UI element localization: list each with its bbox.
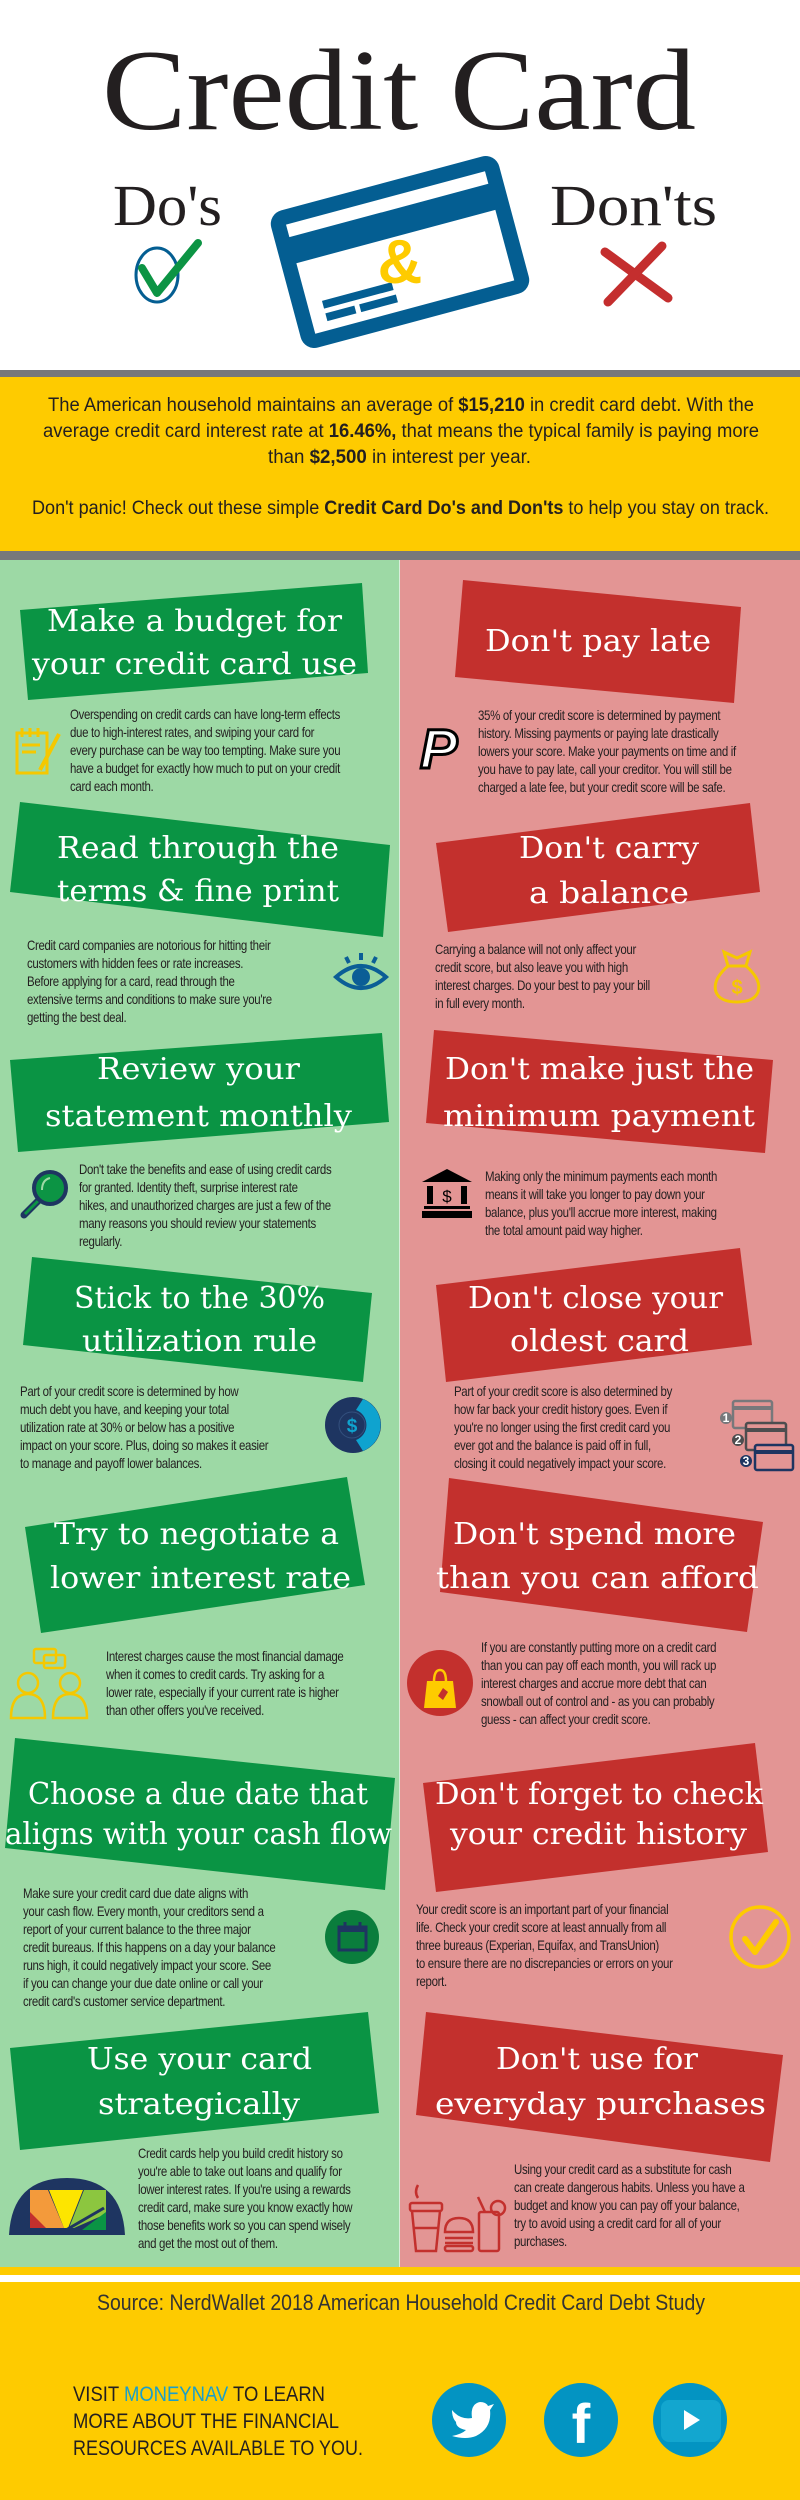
body text: credit score, but also leave you with high — [435, 959, 628, 975]
body text: three bureaus (Experian, Equifax, and TransUnion) — [416, 1937, 659, 1953]
icon: facebook: f — [572, 2392, 591, 2455]
body text: credit bureaus. If this happens on a day your balance — [23, 1939, 276, 1955]
icon: facebook — [544, 2383, 618, 2457]
banner: a balance — [529, 876, 689, 911]
body text: when it comes to credit cards. Try asking for a — [105, 1666, 325, 1682]
body text: in full every month. — [435, 995, 525, 1011]
body text: every purchase can be way too tempting. Make sure you — [70, 742, 341, 758]
icon: people talking — [11, 1649, 87, 1718]
body text: lowers your score. Make your payments on time and if — [478, 743, 737, 759]
icon: notepad — [17, 728, 59, 773]
banner: than you can afford — [436, 1561, 759, 1596]
banner: Try to negotiate a — [54, 1517, 339, 1552]
body text: Interest charges cause the most financial damage — [106, 1648, 344, 1664]
call to action text: VISIT MONEYNAV TO LEARN — [73, 2383, 338, 2406]
banner: Don't use for — [496, 2042, 699, 2077]
intro text block — [0, 377, 800, 551]
body text: Before applying for a card, read through the — [27, 973, 235, 989]
body text: you're no longer using the first credit card you — [454, 1419, 670, 1435]
banner: terms & fine print — [57, 874, 339, 909]
body text: than other offers you've received. — [106, 1702, 264, 1718]
body text: closing it could negatively impact your score. — [454, 1455, 666, 1471]
body text: guess - can affect your credit score. — [481, 1711, 650, 1727]
banner: Use your card — [87, 2042, 312, 2077]
icon: calendar — [325, 1910, 379, 1964]
icon: magnifier — [24, 1172, 66, 1215]
body text: extensive terms and conditions to make sure you're — [27, 991, 272, 1007]
body text: interest charges. Do your best to pay your bill — [435, 977, 650, 993]
icon: three cards — [720, 1401, 793, 1470]
panel: don't pay late — [419, 580, 741, 795]
body text: lower rate, especially if your current rate is higher — [106, 1684, 340, 1700]
icon: three cards: 1 — [723, 1411, 730, 1425]
body text: Make sure your credit card due date aligns with — [23, 1885, 248, 1901]
banner — [20, 583, 368, 700]
body text: Part of your credit score is also determined by — [454, 1383, 673, 1399]
banner — [10, 802, 390, 937]
icon: money bag — [715, 952, 759, 1002]
banner: minimum payment — [443, 1099, 755, 1134]
body text: due to high-interest rates, and swiping your card for — [70, 724, 315, 740]
banner: Don't pay late — [485, 624, 711, 659]
body text: how far back your credit history goes. Even if — [454, 1401, 668, 1417]
icon: money bag: $ — [731, 977, 743, 999]
body text: Don't take the benefits and ease of using credit cards — [79, 1161, 331, 1177]
icon: three cards: 3 — [743, 1454, 750, 1468]
banner: utilization rule — [82, 1324, 317, 1359]
body text: report. — [416, 1973, 447, 1989]
icon: credit card: & — [378, 228, 422, 297]
icon: P: P — [420, 717, 458, 780]
body text: budget and know you can pay off your balance, — [514, 2197, 740, 2213]
panel: use strategically — [9, 2012, 379, 2251]
panel: make a budget — [16, 583, 368, 794]
banner: your credit card use — [31, 647, 357, 682]
body text: have a budget for exactly how much to put on your credit — [70, 760, 341, 776]
banner — [10, 1033, 389, 1152]
body text: the total amount paid way higher. — [485, 1222, 643, 1238]
body text: runs high, it could negatively impact your score. See — [23, 1957, 271, 1973]
body text: charged a late fee, but your credit score will be safe. — [478, 779, 725, 795]
body text: means it will take you longer to pay down your — [485, 1186, 706, 1202]
body text: can create dangerous habits. Unless you have a — [514, 2179, 746, 2195]
banner — [416, 2012, 783, 2162]
body text: Overspending on credit cards can have long-term effects — [70, 706, 340, 722]
call to action text: RESOURCES AVAILABLE TO YOU. — [73, 2437, 363, 2460]
body text: you're able to take out loans and qualify for — [138, 2163, 343, 2179]
subtitle: don'ts: Don'ts — [550, 173, 717, 238]
icon: rewards gauge — [9, 2178, 125, 2235]
icon: check mark — [136, 243, 198, 302]
body text: many reasons you should review your statements — [79, 1215, 316, 1231]
panel: don't carry a balance — [435, 803, 760, 1011]
banner — [455, 580, 741, 703]
body text: interest charges and accrue more debt that can — [481, 1675, 707, 1691]
panel: check credit history — [416, 1743, 791, 1989]
panel: minimum payment — [422, 1030, 773, 1238]
banner: Make a budget for — [47, 604, 343, 639]
banner: Choose a due date that — [28, 1777, 368, 1812]
body text: credit card's customer service department. — [23, 1993, 225, 2009]
icon: pie chart: $ — [347, 1416, 358, 1437]
banner: statement monthly — [45, 1099, 352, 1134]
body text: to ensure there are no discrepancies or errors on your — [416, 1955, 674, 1971]
banner — [436, 803, 760, 932]
subtitle: do's: Do's — [113, 173, 222, 238]
panel: review statement — [10, 1033, 389, 1249]
panel: don't spend more — [407, 1478, 763, 1727]
body text: Carrying a balance will not only affect your — [435, 941, 637, 957]
body text: snowball out of control and - as you can probably — [481, 1693, 715, 1709]
body text: If you are constantly putting more on a credit card — [481, 1639, 716, 1655]
body text: utilization rate at 30% or below has a positive — [20, 1419, 234, 1435]
body text: to manage and payoff lower balances. — [20, 1455, 202, 1471]
banner: oldest card — [510, 1324, 689, 1359]
body text: Credit card companies are notorious for hitting their — [27, 937, 271, 953]
banner: strategically — [98, 2087, 300, 2122]
footer — [0, 2267, 800, 2500]
banner — [436, 1478, 763, 1632]
banner: aligns with your cash flow — [5, 1817, 392, 1852]
body text: for granted. Identity theft, surprise interest rate — [79, 1179, 298, 1195]
panel: 30% rule — [20, 1257, 381, 1471]
intro text block: The American household maintains an average of $15,210 in credit card debt. With the — [48, 395, 754, 416]
icon: food and drink — [410, 2185, 505, 2251]
banner: Don't make just the — [445, 1052, 754, 1087]
banner: Don't forget to check — [435, 1777, 764, 1812]
body text: your cash flow. Every month, your creditors send a — [23, 1903, 265, 1919]
banner — [436, 1248, 752, 1382]
body text: those benefits work so you can spend wisely — [138, 2217, 351, 2233]
banner: Read through the — [57, 831, 339, 866]
banner: lower interest rate — [50, 1561, 351, 1596]
banner: Don't close your — [468, 1281, 724, 1316]
icon: x mark — [605, 246, 668, 302]
body text: ever got and the balance is paid off in full, — [454, 1437, 651, 1453]
body text: try to avoid using a credit card for all of your — [514, 2215, 722, 2231]
body text: credit card, make sure you know exactly how — [138, 2199, 353, 2215]
banner — [10, 2012, 379, 2150]
banner: everyday purchases — [435, 2087, 766, 2122]
body text: report of your current balance to the three major — [23, 1921, 252, 1937]
banner: Don't spend more — [453, 1517, 736, 1552]
banner — [423, 1743, 768, 1892]
body text: Your credit score is an important part of your financial — [416, 1901, 668, 1917]
body text: 35% of your credit score is determined by payment — [478, 707, 721, 723]
banner — [426, 1030, 773, 1153]
icon: bank: $ — [442, 1187, 452, 1206]
icon: eye — [336, 953, 386, 988]
banner — [5, 1738, 395, 1890]
body text: if you can change your due date online or call your — [23, 1975, 264, 1991]
icon: pie chart — [325, 1397, 381, 1453]
body text: you have to pay late, call your creditor. You will still be — [478, 761, 732, 777]
call to action text: MORE ABOUT THE FINANCIAL — [73, 2410, 339, 2433]
banner: your credit history — [449, 1817, 747, 1852]
body text: history. Missing payments or paying late drastically — [478, 725, 719, 741]
banner — [25, 1477, 365, 1633]
banner: Don't carry — [519, 831, 699, 866]
body text: lower interest rates. If you're using a rewards — [138, 2181, 351, 2197]
icon: youtube — [653, 2383, 727, 2457]
icon: twitter — [432, 2383, 506, 2457]
body text: balance, plus you'll accrue more interest, making — [485, 1204, 717, 1220]
panel: read the terms — [10, 802, 390, 1025]
panel: oldest card — [436, 1248, 794, 1472]
body text: customers with hidden fees or rate increases. — [27, 955, 243, 971]
body text: Making only the minimum payments each month — [485, 1168, 717, 1184]
body text: than you can pay off each month, you will rack up — [481, 1657, 716, 1673]
header — [102, 27, 717, 348]
panel: everyday purchases — [408, 2012, 783, 2252]
body text: regularly. — [79, 1233, 122, 1249]
body text: much debt you have, and keeping your total — [20, 1401, 229, 1417]
body text: Using your credit card as a substitute for cash — [514, 2161, 732, 2177]
body text: purchases. — [514, 2233, 567, 2249]
intro text block: than $2,500 in interest per year. — [268, 447, 531, 468]
body text: and get the most out of them. — [138, 2235, 278, 2251]
banner: Review your — [97, 1052, 301, 1087]
body text: card each month. — [70, 778, 153, 794]
body text: life. Check your credit score at least annually from all — [416, 1919, 666, 1935]
source text: Source: NerdWallet 2018 American Household Credit Card Debt Study — [97, 2290, 705, 2315]
banner: Stick to the 30% — [74, 1281, 325, 1316]
icon: shopping bag — [407, 1650, 473, 1716]
panel: negotiate rate — [10, 1477, 365, 1720]
icon: three cards: 2 — [735, 1433, 742, 1447]
icon: credit card — [268, 153, 532, 351]
panel: due date — [5, 1738, 395, 2009]
body text: impact on your score. Plus, doing so makes it easier — [20, 1437, 269, 1453]
body text: getting the best deal. — [27, 1009, 126, 1025]
icon: check circle — [731, 1907, 789, 1967]
intro text block: Don't panic! Check out these simple Credit Card Do's and Don'ts to help you stay on track. — [32, 498, 769, 519]
icon: bank — [422, 1169, 472, 1218]
body text: Part of your credit score is determined by how — [20, 1383, 239, 1399]
banner — [23, 1257, 372, 1382]
title: Credit Card — [102, 27, 696, 155]
body text: Credit cards help you build credit history so — [138, 2145, 343, 2161]
body text: hikes, and unauthorized charges are just a few of the — [79, 1197, 331, 1213]
intro text block: average credit card interest rate at 16.46%, that means the typical family is paying more — [43, 421, 759, 442]
